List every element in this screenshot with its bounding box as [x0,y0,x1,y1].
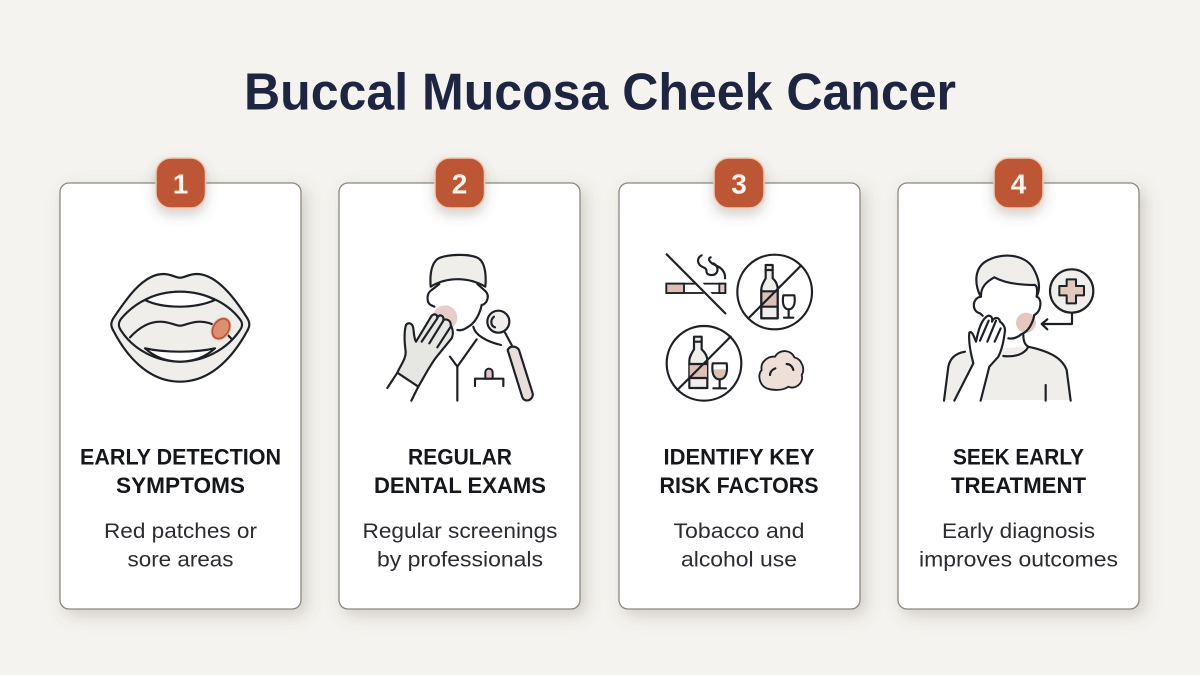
panel: regular dental exams [339,158,580,609]
card 1 background [60,183,301,609]
description 4 line 1: Early diagnosis [942,519,1095,543]
description 3 line 2: alcohol use [681,548,797,572]
badge 3: 3 [731,168,747,200]
heading 1 line 2: SYMPTOMS [116,473,245,498]
heading 2 line 1: REGULAR [408,444,512,470]
icon: smoke cloud [759,351,803,390]
card 3 background [619,183,860,609]
heading 3 line 2: RISK FACTORS [660,473,818,498]
badge 1 [156,158,206,208]
panel: identify key risk factors [619,158,860,609]
badge 4: 4 [1011,168,1027,200]
badge 4 [994,158,1043,208]
panel: early detection symptoms [60,158,301,609]
card 4 background [898,183,1139,609]
description 3 line 1: Tobacco and [674,519,804,543]
heading 2 line 2: DENTAL EXAMS [374,473,546,498]
badge 2: 2 [452,168,467,200]
icon: crossed cigarette [666,254,725,313]
icon: prohibited bottle and glass [737,255,812,329]
heading 4 line 1: SEEK EARLY [953,444,1084,470]
badge 2 [435,158,484,208]
icon: risk factors [666,254,812,401]
description 2 line 1: Regular screenings [362,519,558,543]
heading 1 line 1: EARLY DETECTION [80,444,281,470]
icon: prohibited bottle and wine [667,326,741,401]
icon: open mouth with lesion [111,274,249,382]
heading 4 line 2: TREATMENT [951,473,1087,498]
heading 3 line 1: IDENTIFY KEY [664,444,815,470]
panel: seek early treatment [898,158,1139,609]
description 1 line 2: sore areas [128,548,234,572]
description 1 line 1: Red patches or [104,519,257,543]
badge 1: 1 [173,168,188,200]
description 2 line 2: by professionals [377,548,543,572]
card 2 background [339,183,580,609]
description 4 line 2: improves outcomes [919,548,1118,572]
icon: patient with cheek marker and medical cross [944,256,1093,401]
badge 3 [714,158,764,208]
title: Buccal Mucosa Cheek Cancer [244,62,956,120]
icon: dentist with mirror and glove [387,255,533,401]
